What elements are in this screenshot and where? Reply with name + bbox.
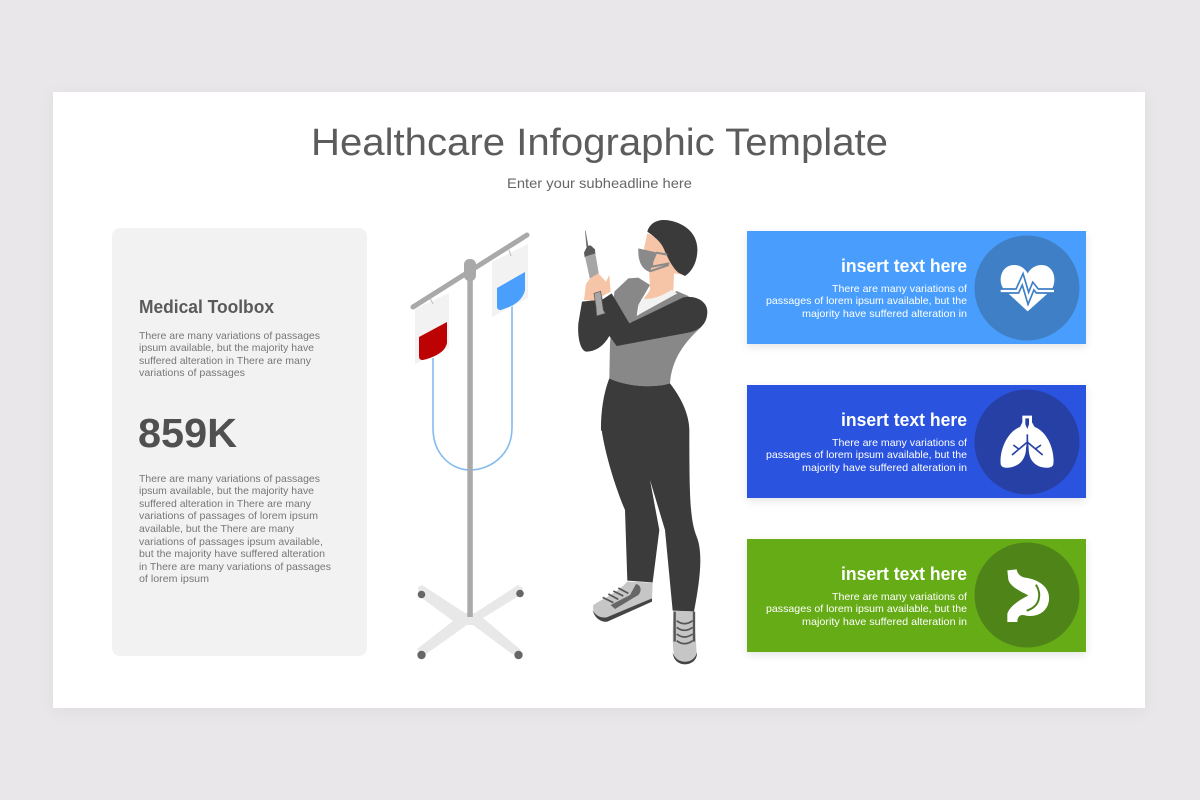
body paragraph: variations of passages of lorem ipsum xyxy=(139,510,318,522)
card text xyxy=(766,437,967,474)
icon: lungs xyxy=(974,390,1080,494)
big number: 859K xyxy=(138,410,237,456)
syringe lower xyxy=(594,291,605,316)
slide card xyxy=(53,92,1145,708)
syringe xyxy=(584,231,605,316)
card text: majority have suffered alteration in xyxy=(802,616,967,628)
icon: stomach xyxy=(974,542,1080,648)
icon: heart xyxy=(974,236,1080,340)
right shoe xyxy=(673,611,697,664)
card text: passages of lorem ipsum available, but the xyxy=(766,295,967,307)
body paragraph: of lorem ipsum xyxy=(139,573,209,585)
card heading: insert text here xyxy=(841,256,967,276)
left blood bag xyxy=(415,293,449,364)
white collar xyxy=(637,290,677,315)
intro paragraph: suffered alteration in There are many xyxy=(139,355,312,367)
card heading: insert text here xyxy=(841,564,967,584)
hair xyxy=(647,220,697,276)
body paragraph: ipsum available, but the majority have xyxy=(139,485,314,497)
tube xyxy=(433,306,512,470)
body paragraph xyxy=(139,473,331,585)
card text: passages of lorem ipsum available, but the xyxy=(766,603,967,615)
nurse illustration xyxy=(578,220,707,664)
upper body xyxy=(578,220,707,431)
card text xyxy=(766,283,967,320)
right blue bag xyxy=(492,244,528,317)
intro paragraph: There are many variations of passages xyxy=(139,330,320,342)
body paragraph: suffered alteration in There are many xyxy=(139,498,312,510)
hand xyxy=(584,273,611,301)
mask xyxy=(638,248,669,272)
crossbar xyxy=(413,235,527,307)
IV stand illustration xyxy=(413,235,528,659)
title: Healthcare Infographic Template xyxy=(311,122,888,164)
body paragraph: in There are many variations of passages xyxy=(139,561,331,573)
card text: passages of lorem ipsum available, but the xyxy=(766,449,967,461)
body paragraph: There are many variations of passages xyxy=(139,473,320,485)
body paragraph: variations of passages ipsum available, xyxy=(139,536,323,548)
intro paragraph xyxy=(139,330,320,379)
card: stomach xyxy=(747,539,1086,652)
card text: There are many variations of xyxy=(832,283,967,295)
legs xyxy=(593,430,700,664)
card: heart xyxy=(747,231,1086,344)
card: lungs xyxy=(747,385,1086,498)
base xyxy=(417,585,524,659)
dark sleeves xyxy=(578,293,707,352)
subtitle: Enter your subheadline here xyxy=(507,175,692,191)
body paragraph: available, but the There are many xyxy=(139,523,295,535)
card text: There are many variations of xyxy=(832,591,967,603)
card text xyxy=(766,591,967,628)
card text: majority have suffered alteration in xyxy=(802,308,967,320)
gray top xyxy=(609,278,702,386)
leggings waist xyxy=(601,378,689,431)
left shoe xyxy=(593,582,653,622)
panel heading: Medical Toolbox xyxy=(139,297,274,317)
panel: medical toolbox xyxy=(112,228,367,656)
skin xyxy=(638,233,685,307)
card heading: insert text here xyxy=(841,410,967,430)
card text: There are many variations of xyxy=(832,437,967,449)
body paragraph: but the majority have suffered alteration xyxy=(139,548,325,560)
card text: majority have suffered alteration in xyxy=(802,462,967,474)
pole xyxy=(467,270,473,617)
intro paragraph: variations of passages xyxy=(139,367,245,379)
intro paragraph: ipsum available, but the majority have xyxy=(139,342,314,354)
leggings xyxy=(602,430,700,612)
